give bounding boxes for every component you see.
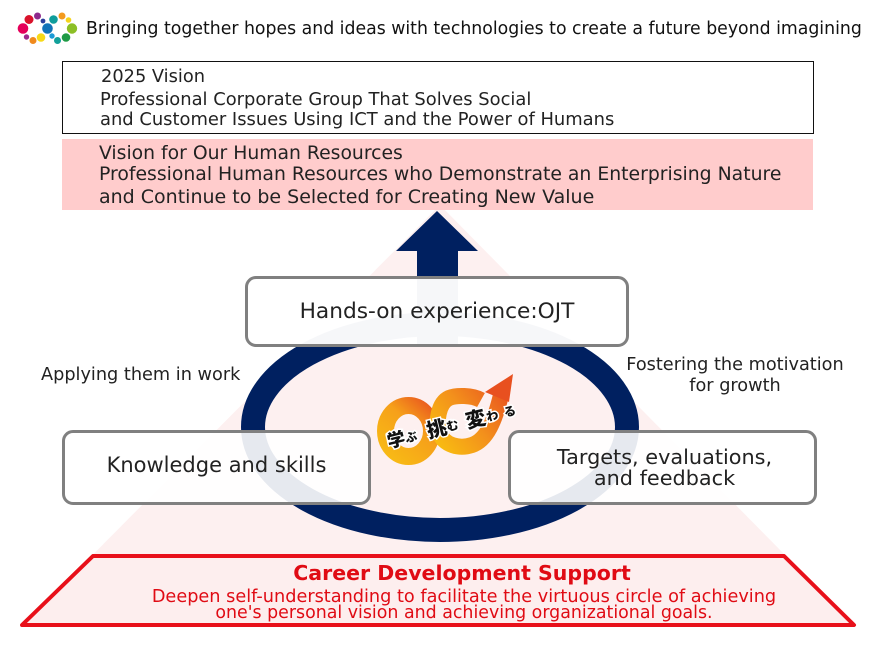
vision heading: 2025 Vision bbox=[101, 66, 205, 87]
vision text: and Customer Issues Using ICT and the Power of Humans bbox=[100, 109, 614, 130]
box: knowledge and skills bbox=[62, 430, 371, 505]
box: hands-on experience: Hands-on experience:OJT bbox=[300, 299, 574, 324]
human resources text: Professional Human Resources who Demonstrate an Enterprising Nature bbox=[99, 164, 781, 185]
panel: 2025 vision bbox=[62, 61, 814, 134]
logo: learn challenge change: わ bbox=[484, 406, 500, 425]
logo: learn challenge change: 変 bbox=[462, 401, 488, 434]
label: fostering bbox=[626, 355, 844, 396]
career text bbox=[152, 587, 776, 623]
label: fostering: Fostering the motivation bbox=[626, 355, 844, 375]
box: targets bbox=[508, 430, 817, 505]
logo: dotted infinity bbox=[18, 12, 78, 44]
logo: learn challenge change: ぶ bbox=[403, 427, 419, 447]
box: targets: Targets, evaluations, bbox=[557, 444, 772, 468]
human resources text bbox=[99, 164, 781, 208]
logo: learn challenge change: 挑 bbox=[423, 411, 450, 444]
logo: learn challenge change: 学 bbox=[384, 424, 408, 454]
career heading: Career Development Support bbox=[293, 561, 631, 585]
box: targets: and feedback bbox=[594, 466, 735, 490]
career text: Deepen self-understanding to facilitate the virtuous circle of achieving bbox=[152, 587, 776, 607]
logo: learn challenge change: む bbox=[445, 416, 460, 435]
tagline: Bringing together hopes and ideas with technologies to create a future beyond imagining bbox=[86, 19, 862, 39]
label: fostering: for growth bbox=[689, 376, 781, 396]
logo: learn challenge change: る bbox=[502, 401, 518, 421]
panel: vision for human resources bbox=[62, 139, 813, 210]
box: knowledge and skills: Knowledge and skills bbox=[107, 453, 326, 477]
box: hands-on experience bbox=[245, 276, 629, 347]
vision text bbox=[100, 89, 614, 130]
career text: one's personal vision and achieving organizational goals. bbox=[215, 603, 713, 623]
label: applying: Applying them in work bbox=[41, 365, 240, 385]
human resources text: and Continue to be Selected for Creating New Value bbox=[99, 186, 594, 208]
human resources heading: Vision for Our Human Resources bbox=[99, 143, 403, 164]
vision text: Professional Corporate Group That Solves Social bbox=[100, 89, 531, 110]
